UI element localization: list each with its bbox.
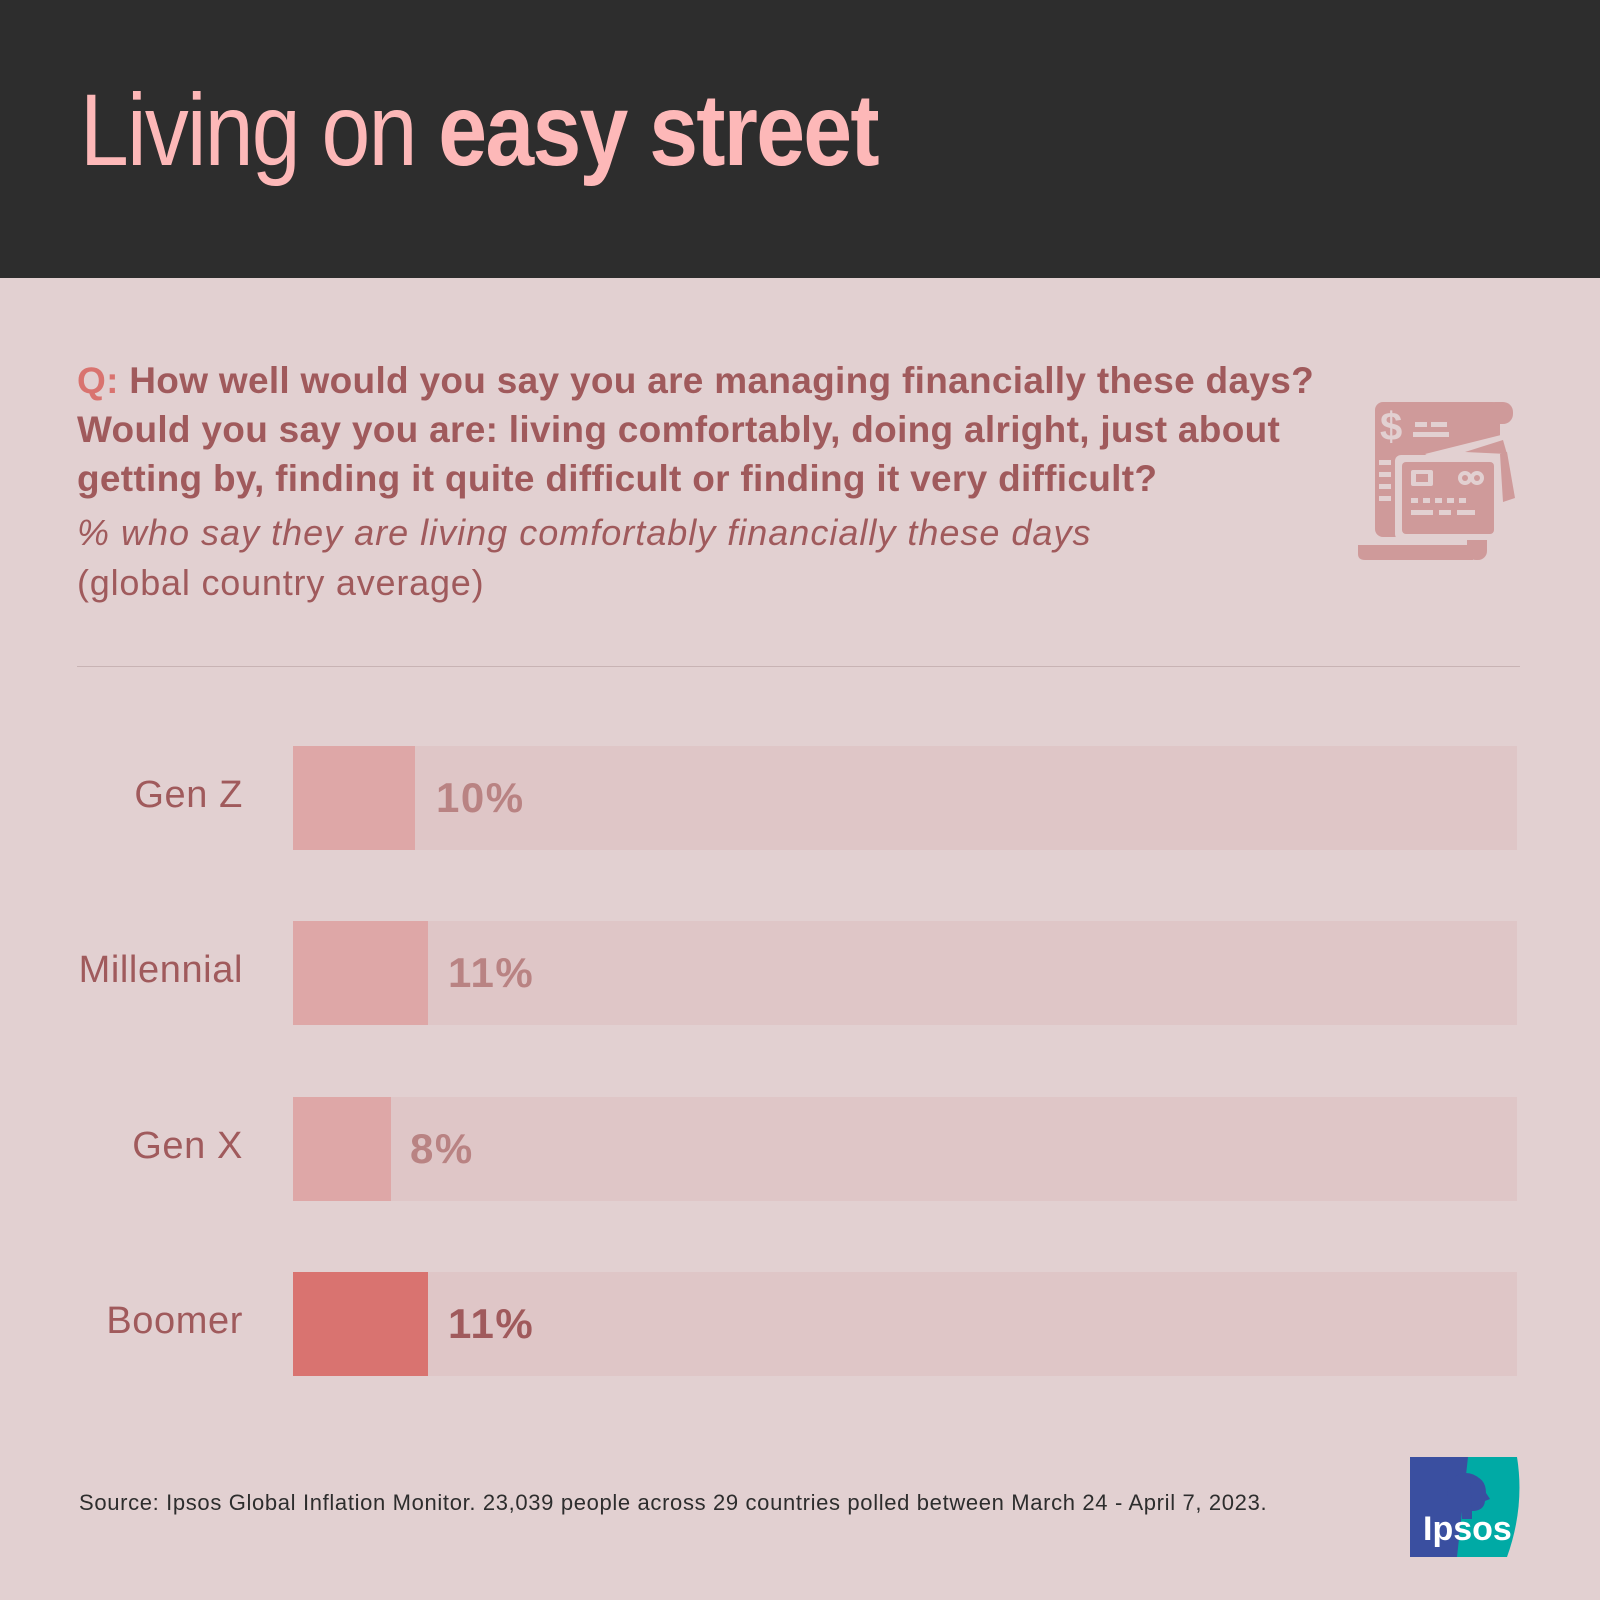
subtitle [77,512,1091,603]
source note: Source: Ipsos Global Inflation Monitor. 23,039 people across 29 countries polled between March 24 - April 7, 2023. [79,1490,1267,1515]
title: Living on easy street [80,73,878,187]
question text: Would you say you are: living comfortably, doing alright, just about [77,409,1280,450]
row: Millennial: 11% [448,949,534,996]
header band [0,0,1600,278]
row: Gen Z: 10% [436,774,525,821]
row: Gen X: Gen X [132,1125,243,1167]
row: Boomer [106,1272,1517,1376]
question text: Q: How well would you say you are managing financially these days? [77,360,1314,401]
icon: receipt with credit card [1358,402,1515,560]
row: Millennial: Millennial [79,949,243,991]
row: Boomer: 11% [448,1300,534,1347]
row: Gen Z [134,746,1517,850]
subtitle: (global country average) [77,562,484,603]
question text: getting by, finding it quite difficult or finding it very difficult? [77,458,1157,499]
row: Boomer: Boomer [106,1300,243,1342]
row: Gen X: 8% [410,1125,474,1172]
question text [77,360,1314,499]
icon: receipt with credit card: $ [1380,405,1402,449]
row: Gen X [132,1097,1517,1201]
row: Millennial [79,921,1517,1025]
logo: Ipsos: Ipsos [1423,1510,1512,1548]
logo: Ipsos [1410,1457,1520,1557]
bar chart [79,746,1517,1376]
row: Gen Z: Gen Z [134,774,243,816]
subtitle: % who say they are living comfortably financially these days [77,512,1091,553]
